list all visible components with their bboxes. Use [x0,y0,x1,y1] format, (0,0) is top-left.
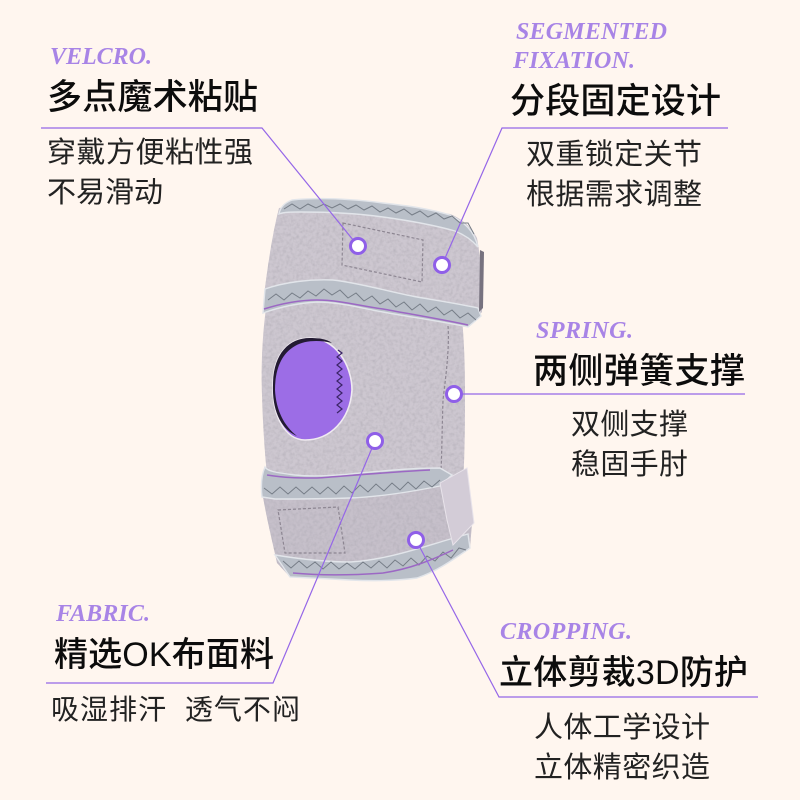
heading: 精选OK布面料 [54,636,274,674]
leader line [46,441,375,683]
kneecap opening [273,338,352,440]
description [526,138,702,211]
description: 立体精密织造 [534,751,710,784]
heading: 立体剪裁3D防护 [499,654,748,692]
heading: 多点魔术粘贴 [47,78,258,117]
english label [512,19,667,74]
upper strap top stitching [284,204,474,234]
english label: SPRING. [536,318,633,344]
upper strap buckle edge [479,250,484,312]
lower strap top stitching [264,480,440,494]
upper velcro patch [342,223,423,282]
lower strap [261,467,474,581]
product: knee brace [261,199,484,581]
lower strap top purple stripe [267,470,430,478]
hotspot: spring [446,386,462,402]
english label: FABRIC. [55,601,150,627]
heading: 分段固定设计 [510,82,721,121]
lower strap bottom purple stripe [293,550,453,575]
description: 不易滑动 [47,177,163,209]
description [47,136,253,209]
hotspot: segmented fixation [434,258,450,272]
leader line [41,128,358,246]
description: 人体工学设计 [534,711,710,744]
description: 双侧支撑 [571,408,688,441]
side stitching [441,326,448,470]
callout: velcro [41,44,358,246]
description [571,408,688,481]
brace main sleeve [262,295,465,485]
hotspot: fabric [368,434,382,448]
right closure tab [440,468,474,545]
callout: fabric [46,441,375,725]
upper strap [263,199,484,327]
spring [337,350,342,413]
description: 穿戴方便粘性强 [47,136,253,169]
callout: cropping [416,540,758,784]
upper strap lower band [263,280,481,327]
english label: SEGMENTED [516,19,667,45]
heading: 两侧弹簧支撑 [533,352,745,391]
callout: spring [454,318,745,481]
english label: CROPPING. [500,619,632,645]
leader line [442,128,728,265]
description [534,711,710,784]
lower strap body [263,480,472,581]
english label: FIXATION. [512,48,635,74]
upper strap lower stitching [268,289,476,320]
leader line [416,540,758,697]
leader line [454,393,745,395]
lower strap bottom band [275,534,470,581]
lower strap bottom stitching [283,548,466,569]
english label: VELCRO. [50,44,152,70]
description: 吸湿排汗 透气不闷 [51,694,300,725]
lower velcro patch [278,507,345,553]
description: 根据需求调整 [526,178,702,211]
lower strap top band [261,467,452,499]
upper strap top band [279,199,478,247]
hotspot: velcro [350,238,366,254]
upper strap body [264,203,482,327]
callout: segmented fixation [442,19,728,265]
description: 双重锁定关节 [526,138,702,171]
upper strap purple stripe [264,300,468,325]
description: 稳固手肘 [571,448,688,481]
hotspot: cropping [408,532,424,548]
